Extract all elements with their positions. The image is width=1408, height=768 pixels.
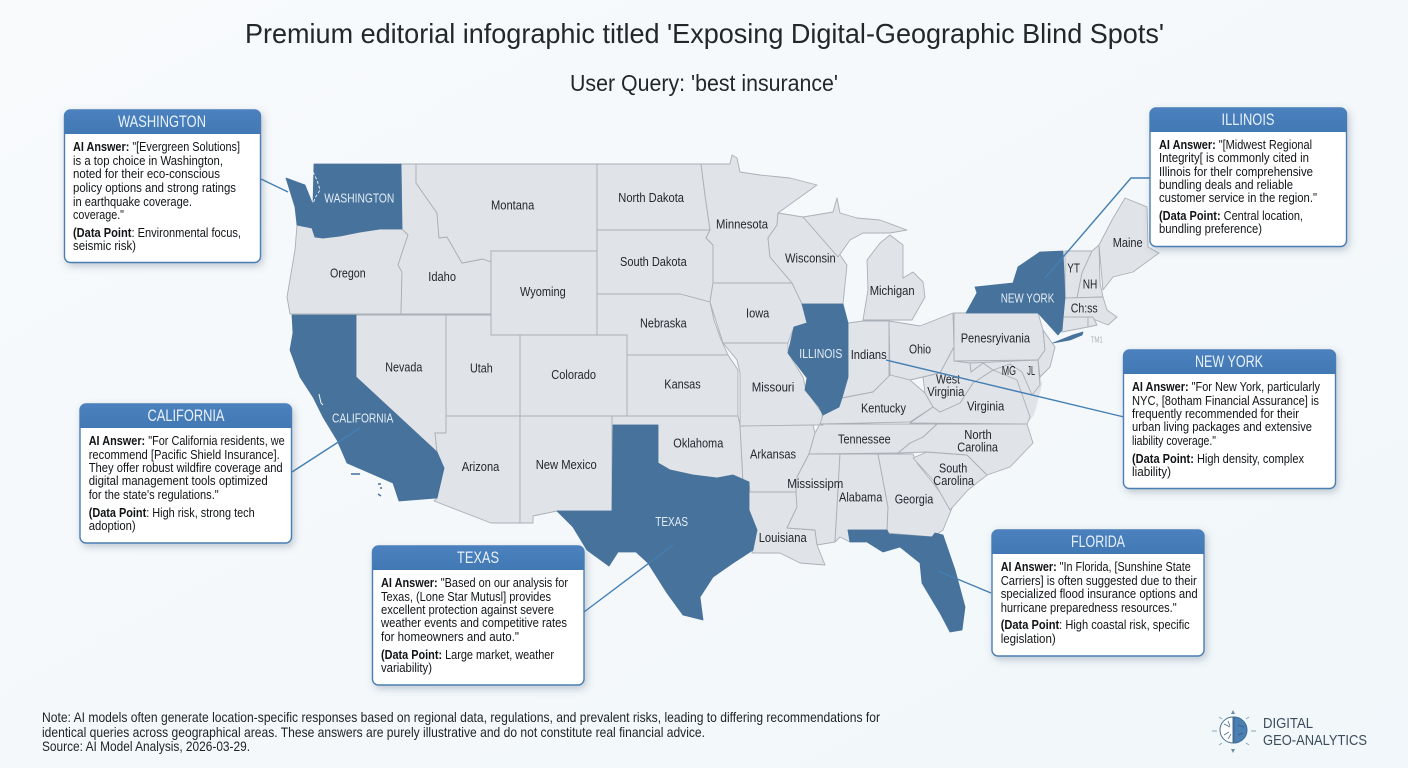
panel text: New York answer: frequently recommended for their [1132,406,1300,421]
panel header: Florida: FLORIDA [1071,533,1125,551]
state name labels: Idaho [428,269,456,284]
arrow: Illinois leader line [1045,178,1150,278]
panel text: New York answer: liability coverage." [1132,433,1216,448]
state: Maryland [970,360,1040,395]
state: Upper Michigan [803,198,907,257]
panel text: Washington answer: coverage." [73,207,124,222]
state: Montana [416,164,597,263]
panel: Florida callout [992,530,1204,656]
highlighted state: Illinois [788,304,848,415]
footnote: Note: AI models often generate location-specific responses based on regional data, regulations, and prevalent risks, leading to differing recommendations for [42,710,880,725]
panel text: Washington answer: noted for their eco-conscious [73,166,220,181]
panel header: Texas [372,546,584,570]
panel text: New York answer: NYC, [8otham Financial Assurance] is [1132,393,1319,408]
state name labels: Utah [470,360,493,376]
state: Oklahoma [612,416,743,482]
state: North Carolina [898,424,1033,475]
panel text: Illinois answer: bundling preference) [1159,221,1262,236]
state: New Jersey [1038,330,1055,377]
state name labels: South Dakota [620,254,687,269]
footnote: identical queries across geographical areas. These answers are purely illustrative and do not constitute real financial advice. [42,725,705,740]
state name labels: Arkansas [750,446,796,462]
highlighted state: Texas [557,425,757,620]
state name labels: Mississipm [787,476,843,491]
logo [1212,710,1367,753]
state name labels: Maine [1113,235,1143,250]
panel text: Texas answer: AI Answer: "Based on our analysis for [381,575,569,590]
state name labels: Carolina [957,440,999,454]
panel text: Texas answer: excellent protection against severe [381,602,554,617]
state: Arkansas [740,425,815,492]
panel text: Texas answer: (Data Point: Large market, weather [381,647,554,662]
panel text: California answer: adoption) [89,518,136,533]
panel text: Texas answer: weather events and competitive rates [380,615,567,630]
panel text: California answer: They offer robust wildfire coverage and [89,460,283,475]
state name labels: NH [1083,276,1097,292]
panel text: Washington answer: AI Answer: "[Evergreen Solutions] [73,139,240,154]
state name labels: Montana [491,198,535,212]
panel header: California [80,404,292,428]
panel text: Washington answer: seismic risk) [73,238,136,253]
state: Ohio [889,313,954,380]
state name labels: Oklahoma [673,436,724,450]
state name labels: New Mexico [536,457,597,472]
state name labels: Louisiana [759,530,807,545]
panel text: California answer [89,433,285,533]
state name labels: WASHINGTON [324,190,394,206]
panel text: Texas answer [380,575,569,675]
map of United States [286,155,1159,632]
state: Maine [1099,198,1159,290]
state: Alabama [835,454,888,542]
state: Lower Michigan [863,235,925,320]
state: South Carolina [913,452,987,510]
state: Utah [446,315,520,416]
panel header: New York: NEW YORK [1195,353,1263,371]
state name labels: Iowa [746,306,770,320]
state: West Virginia [923,347,993,412]
state name labels: Carolina [933,473,975,488]
panel text: Washington answer: (Data Point: Environmental focus, [73,225,241,240]
state name labels: CALIFORNIA [332,410,394,426]
panel: New York callout [1124,350,1336,488]
state name labels: North [964,427,992,442]
icon: brain compass [1212,710,1256,753]
panel: Texas callout [372,546,584,685]
panel text: Florida answer [1001,559,1198,646]
state: Virginia [910,370,1030,424]
footnote [42,710,880,754]
state: Kentucky [820,375,933,424]
state: Louisiana [749,492,825,565]
logo text: GEO-ANALYTICS [1263,733,1367,749]
state: Vermont [1065,251,1092,298]
panel header: Florida [992,530,1204,554]
panel text: New York answer: liability) [1132,464,1171,479]
state: Wyoming [491,251,597,335]
state name labels: Nevada [385,360,423,374]
panel text: Illinois answer: bundling deals and reliable [1159,177,1293,192]
panel text: New York answer [1132,379,1320,479]
state: Kansas [627,355,738,416]
panel: Illinois callout [1150,108,1346,246]
panel text: Illinois answer: customer service in the region." [1159,190,1317,205]
panel text: Illinois answer: (Data Point: Central location, [1159,208,1303,223]
arrow: California leader line [292,428,360,472]
state name labels: ILLINOIS [799,346,843,361]
panel header: Illinois: ILLINOIS [1222,111,1274,129]
state: Missouri [723,343,823,426]
panel text: California answer: digital management tools optimized [89,473,268,488]
state: North Dakota [597,164,710,230]
arrow: Washington leader line [261,179,288,192]
state name labels: Colorado [551,367,596,382]
state name labels: Ohio [909,342,931,356]
state: Colorado [520,335,627,416]
state name labels: Georgia [895,492,934,506]
state: Minnesota [701,155,817,283]
panel text: Washington answer: is a top choice in Washington, [73,153,223,168]
panel header: Illinois [1150,108,1346,132]
state: Arizona [434,416,520,523]
panel text: New York answer: (Data Point: High density, complex [1132,451,1304,466]
state: Oregon [287,225,408,314]
state name labels: Alabama [839,490,883,504]
panel header: Texas: TEXAS [457,549,499,567]
state: New Hampshire [1077,245,1103,298]
panel text: Florida answer: (Data Point: High coastal risk, specific [1001,617,1190,632]
state name labels: JL [1027,363,1035,378]
panel text: Illinois answer: Integrity[ is commonly cited in [1159,150,1309,165]
state name labels: Arizona [462,459,500,474]
state: Connecticut [1062,317,1088,332]
panel text: Florida answer: specialized flood insurance options and [1001,586,1198,601]
subtitle: user query: User Query: 'best insurance' [570,70,838,96]
arrow: Texas leader line [584,545,673,612]
state: Georgia [878,454,952,537]
panel text: Washington answer: in earthquake coverage. [73,194,192,209]
logo text [1263,716,1367,749]
state name labels: North Dakota [618,190,685,205]
state: New Mexico [520,416,612,523]
state name labels: Penesryivania [961,330,1031,346]
state: Massachusetts [1063,297,1117,325]
arrow: Florida leader line [938,571,991,593]
panel text: Florida answer: Carriers] is often suggested due to their [1001,573,1197,588]
state name labels: Missouri [752,380,794,394]
state name labels: Virginia [967,398,1005,414]
state: Pennsylvania [954,313,1045,361]
panel text: California answer: recommend [Pacific Shield Insurance]. [89,447,280,462]
panel header: Washington: WASHINGTON [118,113,206,131]
panel text: Florida answer: legislation) [1001,631,1056,646]
state name labels: South [939,460,967,476]
panel text: Texas answer: variability) [381,660,432,675]
panel text: California answer: AI Answer: "For California residents, we [89,433,285,448]
state: Mississippi [787,454,840,545]
panel: Washington callout [64,110,260,262]
arrow: New York leader line [886,360,1124,417]
state name labels: NEW YORK [1001,290,1055,306]
panel text: Texas answer: Texas, (Lone Star Mutusl] provides [381,589,551,604]
state: Wisconsin [768,213,847,304]
state name labels: Michigan [870,283,915,298]
title: Premium editorial infographic titled 'Exposing Digital-Geographic Blind Spots' [245,18,1164,49]
highlighted state: New York [966,251,1083,343]
state: Nebraska [597,294,728,355]
state name labels: Oregon [330,266,366,280]
state name labels: Nebraska [640,316,687,330]
state: Rhode Island [1088,317,1097,327]
panel text: California answer: (Data Point: High risk, strong tech [89,505,255,520]
state name labels: TM1 [1091,336,1103,344]
logo text: DIGITAL [1263,716,1313,732]
land backing: mid-Atlantic [940,360,1042,424]
state name labels: Minnesota [716,216,769,232]
state name labels: TEXAS [655,514,688,529]
footnote: Source: AI Model Analysis, 2026-03-29. [42,739,250,754]
state name labels: YT [1067,260,1080,276]
panel text: Illinois answer [1159,137,1317,236]
panel header: California: CALIFORNIA [148,407,224,425]
state name labels: West [936,372,960,386]
panel header: Washington [64,110,260,134]
state name labels: Kentucky [861,400,906,416]
state name labels: Virginia [927,384,965,399]
panel text: New York answer: urban living packages and extensive [1132,419,1312,434]
panel: California callout [80,404,292,543]
state: Tennessee [809,424,937,454]
panel text: New York answer: AI Answer: "For New York, particularly [1132,379,1320,394]
state: Iowa [710,283,807,343]
panel text: California answer: for the state's regulations." [89,487,219,502]
highlighted state: Florida [848,530,965,632]
state name labels: MG [1002,363,1016,378]
state name labels [324,190,1143,545]
panel text: Washington answer [73,139,241,253]
state name labels: Ch:ss [1071,300,1098,316]
state: South Dakota [597,230,713,302]
panel text: Illinois answer: AI Answer: "[Midwest Regional [1159,137,1312,152]
state name labels: Kansas [664,376,701,392]
state name labels: Wyoming [520,284,566,299]
panel text: Florida answer: AI Answer: "In Florida, [Sunshine State [1001,559,1191,574]
state: Idaho [398,164,491,314]
state name labels: Indians [851,347,887,362]
state: Nevada [356,315,446,452]
panel text: Texas answer: for homeowners and auto." [381,629,519,644]
highlighted state: Washington [286,164,402,238]
panel text: Washington answer: policy options and strong ratings [73,180,236,195]
panel text: Florida answer: hurricane preparedness resources." [1001,600,1177,615]
panel text: Illinois answer: Illinois for thelr comprehensive [1159,164,1313,179]
state name labels: Wisconsin [785,250,836,266]
state name labels: Tennessee [838,432,891,446]
panel header: New York [1124,350,1336,374]
highlighted state: California [290,315,444,501]
state: Indiana [842,321,889,398]
